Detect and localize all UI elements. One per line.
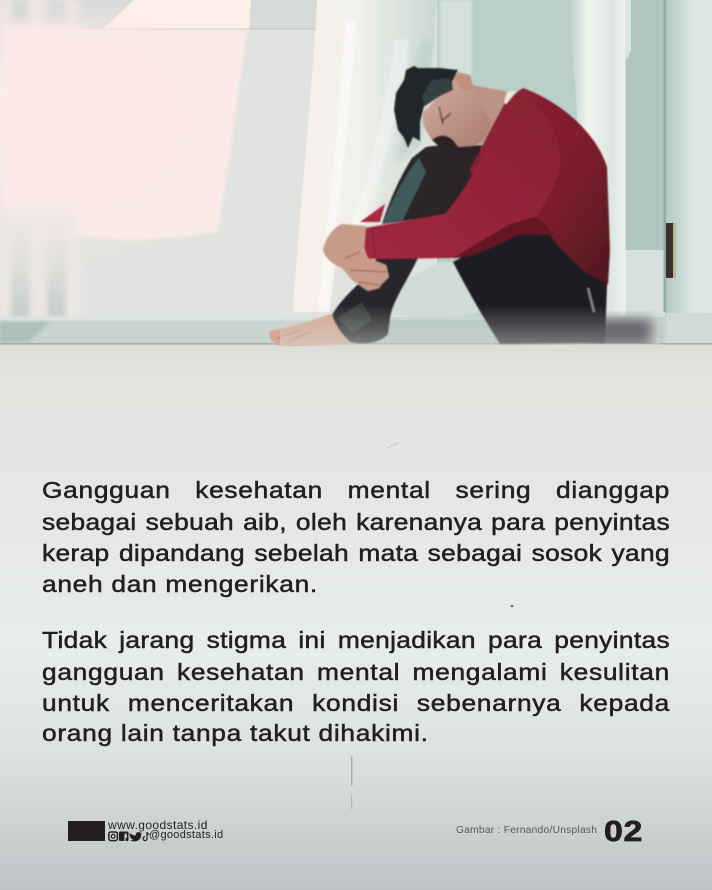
door hinge bbox=[666, 223, 675, 278]
right curtain bbox=[568, 0, 665, 316]
social handle: @goodstats.id bbox=[149, 829, 223, 841]
foot bbox=[269, 314, 352, 346]
hands bbox=[323, 224, 389, 291]
back sleeve sliver bbox=[360, 204, 385, 222]
collar bbox=[504, 91, 517, 104]
face bbox=[422, 72, 492, 147]
hair bbox=[394, 66, 458, 148]
paragraph 2 bbox=[42, 627, 670, 746]
paragraph 1: Gangguan kesehatan mental sering dianggap bbox=[42, 477, 670, 503]
paragraph 1: sebagai sebuah aib, oleh karenanya para penyintas bbox=[42, 509, 670, 535]
paragraph 2: untuk menceritakan kondisi sebenarnya kepada bbox=[42, 690, 670, 716]
door and door frame bbox=[664, 0, 712, 345]
upper thigh / knee bbox=[382, 145, 481, 224]
lower body bbox=[453, 216, 607, 344]
side seam bbox=[588, 288, 594, 312]
man bbox=[269, 66, 610, 346]
paragraph 2: Tidak jarang stigma ini menjadikan para penyintas bbox=[42, 627, 670, 653]
baseboard bbox=[0, 313, 712, 350]
window upper frame bbox=[72, 0, 322, 30]
ear bbox=[453, 73, 472, 90]
wall bbox=[0, 0, 712, 345]
window light glow bbox=[0, 25, 247, 240]
website url: www.goodstats.id bbox=[108, 818, 208, 832]
sweater body bbox=[470, 88, 610, 285]
left curtain bbox=[0, 0, 80, 317]
sleeve bbox=[363, 88, 560, 259]
photo credit: Gambar : Fernando/Unsplash bbox=[456, 825, 597, 836]
paragraph 2: orang lain tanpa takut dihakimi. bbox=[42, 720, 429, 746]
paragraph 2: gangguan kesehatan mental mengalami kesulitan bbox=[42, 659, 670, 685]
paragraph 1: kerap dipandang sebelah mata sebagai sosok yang bbox=[42, 540, 670, 566]
eye bbox=[439, 107, 451, 124]
floor bbox=[0, 344, 712, 890]
fade of photo into the floor bbox=[280, 305, 660, 345]
neck bbox=[462, 85, 510, 145]
middle curtain bbox=[293, 0, 484, 320]
page number: 02 bbox=[604, 816, 643, 848]
paragraph 1: aneh dan mengerikan. bbox=[42, 571, 318, 597]
logo block bbox=[68, 821, 105, 841]
floor marks bbox=[351, 442, 513, 809]
far trouser leg bbox=[332, 256, 418, 343]
paragraph 1 bbox=[42, 477, 670, 598]
social icons bbox=[108, 831, 150, 842]
